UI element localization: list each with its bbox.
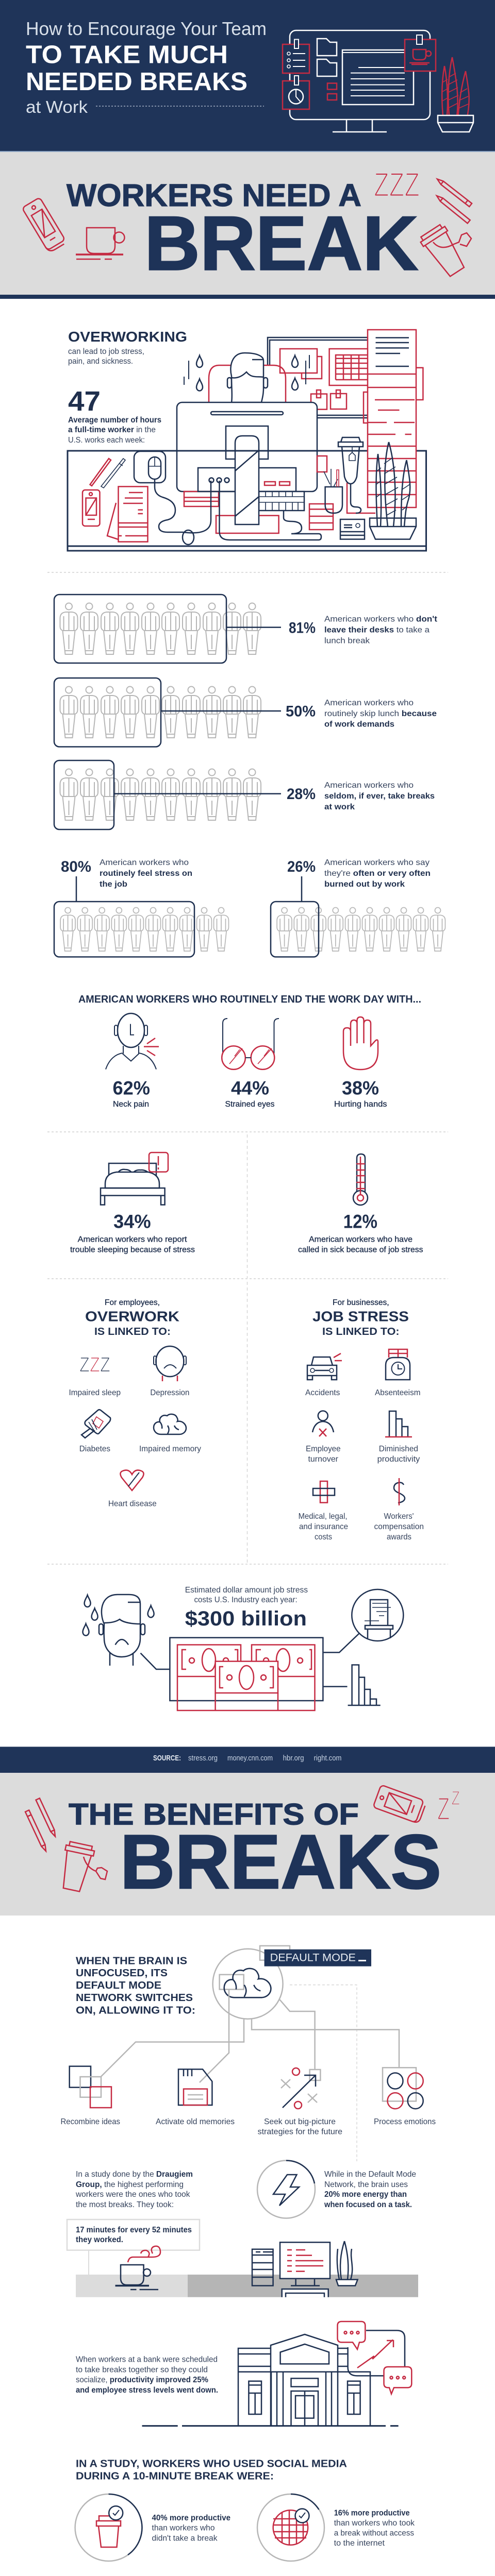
icon: money: [170, 1638, 323, 1710]
icon: pencils: [25, 1798, 57, 1852]
source bar 1: hbr.org: [283, 1754, 304, 1762]
panel: overworking: [68, 329, 426, 551]
item: activate old memories: [156, 2069, 235, 2126]
item: diminished productivity: Diminished: [379, 1445, 418, 1453]
chart: 81% do not leave desks: [54, 595, 438, 663]
heading: BREAKS: [120, 1819, 441, 1905]
stat: called in sick: [298, 1154, 423, 1255]
stat: $300 billion: Estimated dollar amount job stress: [185, 1586, 308, 1595]
stat: 16% more productive: [257, 2494, 415, 2561]
stat: 40% more productive: than workers who: [152, 2524, 215, 2533]
item: employee turnover: turnover: [308, 1455, 339, 1464]
icon: bar chart decline: [324, 1665, 381, 1705]
icon: phone: [373, 1785, 426, 1824]
chart: 50% skip lunch: American workers who: [324, 699, 414, 707]
icon: desktop monitor: [283, 30, 436, 132]
label: default mode banner: [265, 1950, 371, 1967]
title: at Work: [26, 97, 88, 116]
stat: 16% more productive: to the internet: [334, 2539, 385, 2548]
chart: 26% burned out: they're often or very often: [324, 869, 431, 878]
chart: 80% feel stress: the job: [100, 880, 127, 889]
panel: default mode: [61, 1946, 436, 2161]
diagram: brain connections: [101, 1946, 399, 2082]
chart: 81% do not leave desks: lunch break: [324, 637, 370, 645]
stat: 16% more productive: a break without access: [334, 2529, 414, 2537]
text: bank study: socialize, productivity improved 25%: [76, 2376, 208, 2384]
icon: productivity chart: [348, 2330, 405, 2376]
text: default mode energy: when focused on a task.: [324, 2200, 412, 2209]
stat: called in sick: American workers who have: [309, 1235, 412, 1244]
text: study: In a study done by the Draugiem: [76, 2170, 193, 2179]
chart: 28% seldom take breaks: seldom, if ever, take breaks: [324, 792, 435, 801]
heading: end the work day: AMERICAN WORKERS WHO ROUTINELY END THE WORK DAY WITH...: [78, 994, 421, 1005]
stat: hurting hands: 38%: [342, 1078, 379, 1098]
item: process emotions: Process emotions: [374, 2117, 436, 2126]
text: default mode energy: While in the Default Mode: [324, 2170, 416, 2179]
chart: 50% skip lunch: [54, 678, 437, 747]
heading: IN A STUDY, WORKERS WHO USED SOCIAL MEDIA: [76, 2459, 347, 2470]
item: workers compensation: compensation: [374, 1522, 424, 1531]
item: big-picture strategies: Seek out big-picture: [264, 2117, 336, 2126]
icon: pencils: [435, 177, 472, 223]
item: workers compensation: Workers': [384, 1512, 414, 1521]
stat: hurting hands: Hurting hands: [334, 1100, 387, 1109]
stat: 40% more productive: 40% more productive: [152, 2514, 230, 2522]
item: depression: Depression: [150, 1388, 189, 1397]
stat: 16% more productive: than workers who took: [334, 2519, 415, 2528]
title: How to Encourage Your Team: [26, 18, 267, 39]
chart: 26% burned out: 26%: [287, 858, 316, 875]
stat: $300 billion: $300 billion: [185, 1607, 307, 1630]
item: process emotions: [374, 2067, 436, 2126]
label: default mode banner: DEFAULT MODE: [270, 1952, 356, 1964]
heading: WORKERS NEED A: [67, 178, 361, 213]
chart: 80% feel stress: American workers who: [100, 858, 189, 867]
item: employee turnover: Employee: [306, 1445, 341, 1453]
text: bank study: When workers at a bank were scheduled: [76, 2355, 218, 2364]
heading: [76, 1955, 195, 2016]
stat: $300 billion: costs U.S. Industry each year:: [194, 1596, 298, 1604]
heading: [85, 1298, 179, 1337]
stat: strained eyes: 44%: [231, 1078, 269, 1098]
text: bank study: [76, 2355, 218, 2395]
panel: overwork linked to: [69, 1298, 201, 1509]
source bar 1: stress.org: [188, 1754, 218, 1762]
panel: benefits of breaks header: [0, 1773, 495, 1916]
title: TO TAKE MUCH: [26, 41, 228, 69]
item: diminished productivity: [377, 1411, 420, 1464]
item: medical legal insurance: and insurance: [299, 1522, 348, 1531]
chart: 50% skip lunch: routinely skip lunch because: [324, 709, 437, 718]
item: absenteeism: [375, 1349, 421, 1397]
item: impaired sleep: [69, 1353, 121, 1397]
item: activate old memories: Activate old memories: [156, 2117, 235, 2126]
callout: 17 minutes: [67, 2219, 200, 2275]
stat: 47 hours: a full-time worker in the: [68, 426, 156, 434]
icon: lightning in circle: [257, 2161, 315, 2218]
source bar 1: [0, 1747, 495, 1773]
heading: BREAK: [144, 200, 418, 286]
panel: bank study: [76, 2321, 411, 2426]
item: diabetes: [79, 1410, 110, 1453]
icon: stressed face: [82, 1595, 170, 1669]
icon: coffee mug: [116, 2246, 160, 2290]
chart: 50% skip lunch: of work demands: [324, 720, 394, 728]
stat: neck pain: [106, 1013, 159, 1109]
callout: 17 minutes: 17 minutes for every 52 minutes: [76, 2226, 192, 2234]
heading and text: can lead to job stress,: [68, 347, 144, 356]
chart: 28% seldom take breaks: American workers who: [324, 781, 414, 790]
title: NEEDED BREAKS: [26, 68, 248, 96]
text: study: workers were the ones who took: [75, 2190, 190, 2199]
panel: workers need a break: [0, 152, 495, 299]
icon: speech bubble bottom: [384, 2367, 411, 2394]
icon: speech bubble top: [337, 2321, 365, 2349]
stat: trouble sleeping: trouble sleeping because of stress: [70, 1246, 195, 1255]
item: big-picture strategies: strategies for the future: [258, 2128, 342, 2137]
item: workers compensation: awards: [387, 1533, 411, 1541]
item: absenteeism: Absenteeism: [375, 1388, 421, 1397]
text: study: the most breaks. They took:: [76, 2200, 174, 2209]
heading and text: OVERWORKING: [68, 329, 187, 345]
item: medical legal insurance: [299, 1481, 348, 1541]
text: bank study: and employee stress levels went down.: [76, 2386, 218, 2395]
chart: 80% feel stress: [54, 858, 228, 957]
chart: 80% feel stress: routinely feel stress on: [100, 869, 192, 878]
source bar 1: SOURCE:: [153, 1754, 181, 1762]
heading: [76, 2459, 347, 2482]
stat: called in sick: called in sick because of job stress: [298, 1246, 423, 1255]
source bar 1: right.com: [314, 1754, 341, 1762]
stat: 47 hours: Average number of hours: [68, 416, 161, 425]
stat: hurting hands: [334, 1017, 387, 1109]
heading and text: [68, 329, 187, 366]
heading: [69, 1798, 441, 1905]
stat: called in sick: 12%: [343, 1211, 377, 1232]
text: study: Group, the highest performing: [76, 2180, 184, 2189]
item: diminished productivity: productivity: [377, 1455, 420, 1464]
stat: 16% more productive: 16% more productive: [334, 2509, 410, 2517]
stat: 47 hours: [68, 386, 161, 445]
stat: trouble sleeping: 34%: [113, 1211, 151, 1232]
icon: takeaway cup: [57, 1841, 107, 1893]
stat: neck pain: Neck pain: [113, 1100, 149, 1109]
item: depression: [150, 1346, 189, 1397]
heading: THE BENEFITS OF: [69, 1798, 359, 1831]
text: study: [75, 2170, 193, 2209]
item: heart disease: Heart disease: [108, 1499, 157, 1509]
item: big-picture strategies: [258, 2068, 342, 2137]
icon: workstation: [252, 2241, 358, 2297]
icon: plant: [438, 57, 473, 132]
heading: WHEN THE BRAIN IS: [76, 1955, 187, 1967]
item: workers compensation: [374, 1478, 424, 1541]
item: impaired sleep: ZZZ: [79, 1353, 110, 1377]
chart: 26% burned out: [271, 858, 445, 957]
chart: 81% do not leave desks: leave their desks to take a: [324, 625, 430, 635]
source bar 1: money.cnn.com: [227, 1754, 273, 1762]
stat: trouble sleeping: [70, 1153, 195, 1255]
icon: desk in circle: [324, 1589, 403, 1652]
illustration: overworked worker at desk: [68, 330, 426, 551]
panel: job stress linked to: [299, 1298, 424, 1541]
chart: 81% do not leave desks: American workers who don't: [324, 615, 438, 623]
chart: 26% burned out: American workers who say: [324, 858, 430, 867]
heading: UNFOCUSED, ITS: [76, 1968, 168, 1979]
stat: $300 billion: [185, 1586, 308, 1630]
stat: 40% more productive: [75, 2494, 230, 2561]
panel: header: [0, 0, 495, 152]
item: employee turnover: [306, 1411, 341, 1464]
icon: phone: [22, 197, 67, 253]
heading: IS LINKED TO:: [94, 1326, 171, 1337]
item: accidents: [305, 1353, 342, 1397]
stat: strained eyes: [222, 1019, 279, 1109]
chart: 80% feel stress: 80%: [61, 858, 91, 875]
item: heart disease: [108, 1470, 157, 1509]
heading: [67, 178, 418, 286]
text: default mode energy: [324, 2170, 416, 2209]
stat: neck pain: 62%: [112, 1078, 150, 1098]
bar: break vs work ratio: [76, 2275, 418, 2297]
icon: zzz: ZZZ: [374, 165, 420, 204]
heading: ON, ALLOWING IT TO:: [76, 2005, 195, 2016]
item: diabetes: Diabetes: [79, 1445, 110, 1453]
panel: cost of job stress: [82, 1586, 403, 1710]
stat: trouble sleeping: American workers who report: [78, 1235, 187, 1244]
item: recombine ideas: Recombine ideas: [61, 2117, 120, 2126]
stat: 47 hours: U.S. works each week:: [68, 436, 145, 445]
callout: 17 minutes: they worked.: [76, 2235, 123, 2244]
item: medical legal insurance: costs: [315, 1533, 332, 1541]
icon: zz: Z: [437, 1791, 450, 1827]
heading: DEFAULT MODE: [76, 1980, 161, 1991]
heading: DURING A 10-MINUTE BREAK WERE:: [76, 2471, 274, 2482]
heading: For employees,: [105, 1298, 160, 1307]
item: accidents: Accidents: [305, 1388, 340, 1397]
heading: [312, 1298, 409, 1337]
stat: 40% more productive: didn't take a break: [152, 2534, 218, 2543]
heading: For businesses,: [333, 1298, 389, 1307]
chart: 26% burned out: burned out by work: [324, 880, 405, 889]
chart: 50% skip lunch: 50%: [286, 703, 316, 720]
item: impaired memory: Impaired memory: [139, 1445, 201, 1453]
item: medical legal insurance: Medical, legal,: [299, 1512, 348, 1521]
item: impaired sleep: Impaired sleep: [69, 1388, 121, 1397]
stat: 47 hours: 47: [68, 386, 101, 417]
panel: social media study: [75, 2459, 415, 2561]
chart: 28% seldom take breaks: [54, 760, 435, 829]
chart: 28% seldom take breaks: 28%: [287, 786, 316, 803]
heading and text: pain, and sickness.: [68, 357, 133, 366]
heading: JOB STRESS: [312, 1309, 409, 1325]
text: default mode energy: 20% more energy than: [324, 2190, 407, 2199]
icon: takeaway cup with tea tag: [418, 223, 471, 280]
chart: 81% do not leave desks: 81%: [289, 620, 316, 637]
heading: OVERWORK: [85, 1309, 179, 1325]
item: recombine ideas: [61, 2066, 120, 2126]
heading: NETWORK SWITCHES: [76, 1992, 193, 2004]
icon: zz: Z: [452, 1788, 460, 1809]
text: default mode energy: Network, the brain uses: [324, 2180, 408, 2189]
text: bank study: to take breaks together so they could: [76, 2366, 208, 2374]
icon: coffee cup: [76, 228, 125, 259]
panel: draugiem study: [67, 2161, 418, 2297]
stat: strained eyes: Strained eyes: [225, 1100, 275, 1109]
title: [26, 18, 267, 116]
chart: 28% seldom take breaks: at work: [324, 803, 355, 811]
heading: IS LINKED TO:: [322, 1326, 400, 1337]
icon: bank building: [142, 2334, 399, 2426]
item: impaired memory: [139, 1414, 201, 1453]
